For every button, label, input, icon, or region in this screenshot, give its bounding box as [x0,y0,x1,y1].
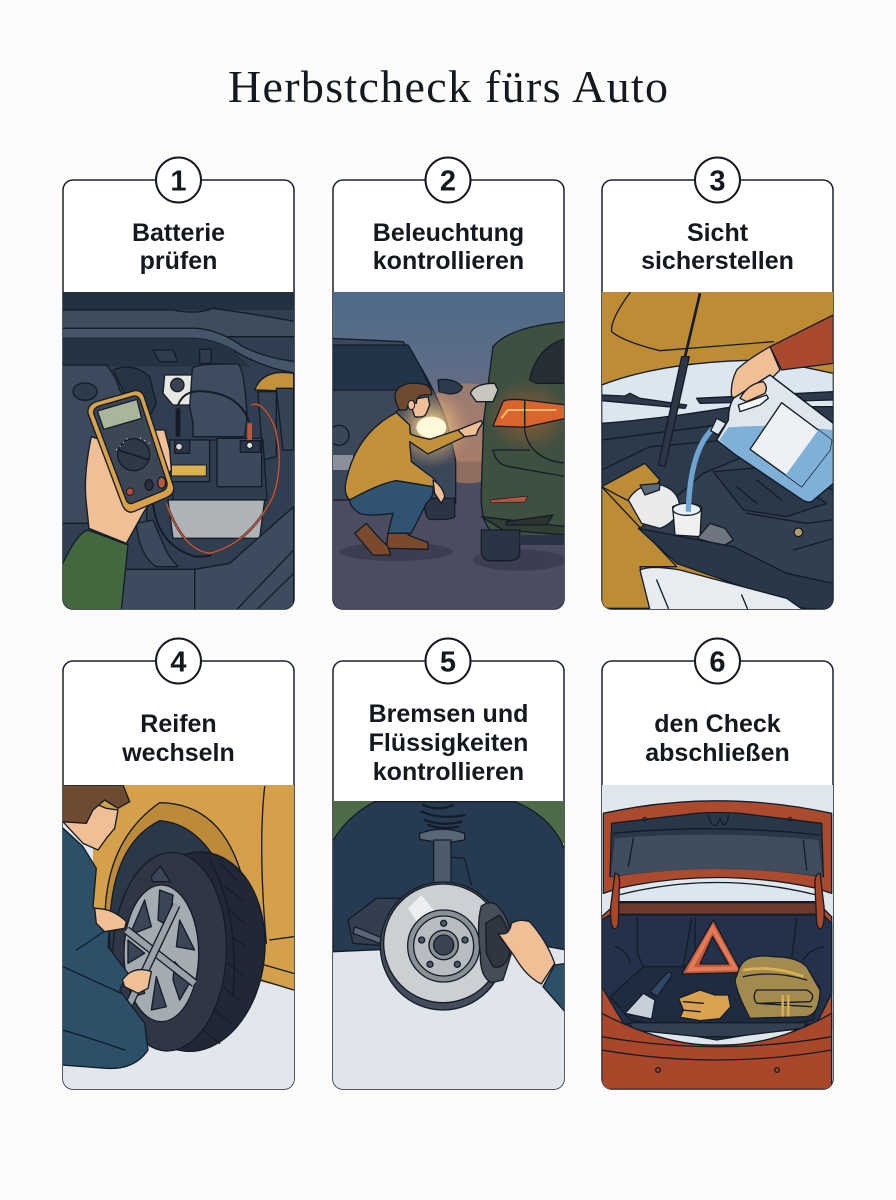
number badge 1 [156,158,201,202]
title: Herbstcheck fürs Auto [228,61,668,112]
card frame 1 [63,180,294,609]
card frame 3 [602,180,833,609]
card frame 5 [333,661,564,1089]
panel 5: Bremsen und Flüssigkeiten kontrollieren [330,661,566,1093]
heading 4: Reifen [140,710,217,738]
illustration: refilling washer fluid [600,290,835,610]
number badge 5: 5 [440,646,456,678]
heading 5: Flüssigkeiten [369,729,528,757]
number badge 3: 3 [709,166,726,198]
illustration: changing a tyre [61,780,296,1093]
heading 2: kontrollieren [373,247,524,275]
panel 3: Sicht sicherstellen [600,180,835,610]
heading 3: sicherstellen [641,247,794,275]
number badge 1: 1 [170,166,187,198]
number badge 2: 2 [440,166,456,198]
card frame 4 [63,661,294,1089]
heading 1: Batterie [132,219,225,247]
panel 6: den Check abschließen [600,661,835,1093]
panel 4: Reifen wechseln [61,661,296,1093]
number badge 2 [426,158,470,202]
illustration: checking car lights at dusk [329,290,571,612]
card frame 2 [333,180,564,609]
number badge 5 [426,638,470,684]
number badge 4: 4 [170,646,187,678]
heading 6: den Check [654,710,781,738]
number badge 6 [695,638,740,684]
heading 5: kontrollieren [373,758,524,786]
number badge 3 [695,158,740,202]
panel 1: Batterie prüfen [61,180,296,613]
illustration: car boot with emergency kit [600,780,835,1093]
heading 4: wechseln [121,739,235,767]
panel 2: Beleuchtung kontrollieren [329,180,571,612]
illustration: battery with multimeter [61,290,296,613]
heading 3: Sicht [687,219,749,247]
number badge 4 [156,638,201,684]
heading 1: prüfen [140,247,217,275]
card frame 6 [602,661,833,1089]
number badge 6: 6 [709,646,726,678]
illustration: brake disc [330,800,566,1093]
heading 6: abschließen [645,739,790,767]
heading 2: Beleuchtung [373,219,524,247]
heading 5: Bremsen und [369,700,528,728]
